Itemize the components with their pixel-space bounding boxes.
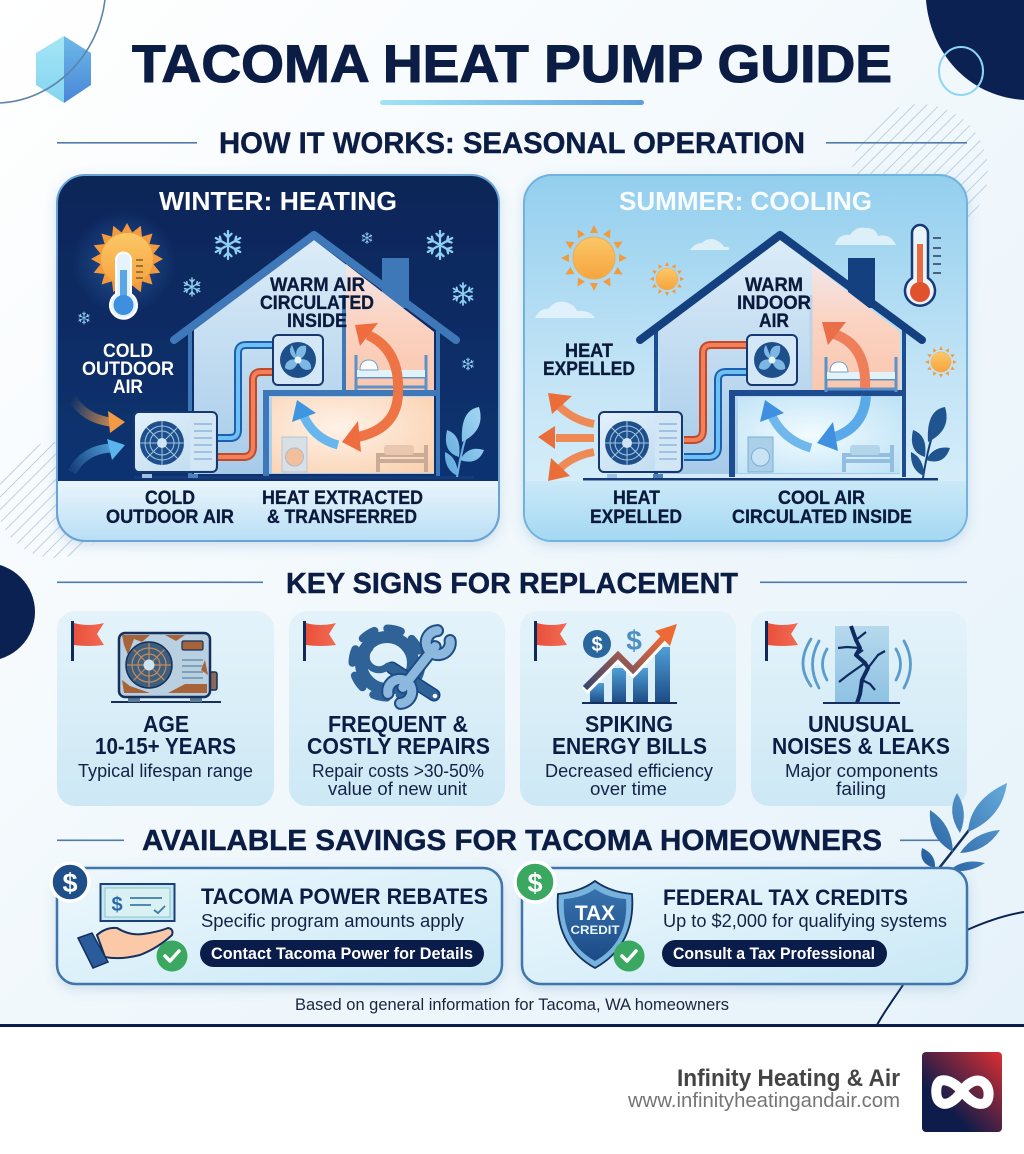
pill: consult tax professional	[662, 940, 887, 967]
brand name: Infinity Heating & Air	[677, 1065, 900, 1092]
heading: repairs: COSTLY REPAIRS	[307, 733, 490, 759]
caption: heat extracted: & TRANSFERRED	[267, 507, 417, 528]
icon: clouds	[535, 228, 896, 318]
text: noises detail	[785, 761, 938, 799]
footnote: Based on general information for Tacoma, WA homeowners	[295, 996, 729, 1014]
heading: repairs: FREQUENT &	[328, 711, 468, 737]
arrows: indoor circulation	[292, 323, 398, 452]
caption: cold outdoor air	[106, 488, 234, 528]
label: heat expelled: EXPELLED	[543, 359, 635, 380]
arrows: outdoor air	[72, 398, 125, 472]
label: heat expelled: HEAT	[565, 341, 613, 362]
text: age detail: Typical lifespan range	[78, 761, 253, 781]
house: winter	[134, 235, 474, 479]
text: repairs detail: Repair costs >30-50%	[312, 761, 484, 781]
icon: check in hand: $	[111, 894, 123, 916]
panel: summer cooling	[524, 175, 967, 541]
label: warm indoor air: WARM	[745, 275, 803, 296]
text: energy detail	[545, 761, 713, 799]
heading: savings: AVAILABLE SAVINGS FOR TACOMA HOMEOWNERS	[142, 825, 882, 857]
panel: tacoma power rebates	[51, 863, 502, 984]
text: energy detail: Decreased efficiency	[545, 761, 713, 781]
caption: cold outdoor air: COLD	[145, 488, 195, 509]
title underline	[380, 100, 644, 105]
caption: cold outdoor air: OUTDOOR AIR	[106, 507, 234, 528]
caption: heat extracted: HEAT EXTRACTED	[262, 488, 423, 509]
label: warm indoor air: AIR	[759, 311, 789, 332]
icon: red flag	[303, 621, 336, 661]
pipes: summer	[684, 345, 747, 457]
heading: noises: NOISES & LEAKS	[772, 733, 950, 759]
label: warm air circulated inside: CIRCULATED	[260, 293, 374, 314]
icon: green check	[614, 940, 644, 972]
footer	[0, 1024, 1024, 1154]
icon: green dollar badge	[515, 862, 555, 902]
label: warm air circulated inside: WARM AIR	[270, 275, 365, 296]
icon: suns	[561, 225, 957, 378]
caption: cool air circulated inside	[732, 488, 912, 528]
icon: plant	[911, 407, 950, 478]
text: federal detail: Up to $2,000 for qualifying systems	[663, 910, 947, 931]
label: warm indoor air: INDOOR	[737, 293, 811, 314]
caption: heat expelled: HEAT	[613, 488, 660, 509]
heading: energy: ENERGY BILLS	[552, 733, 707, 759]
icon: indoor fan unit	[747, 335, 797, 385]
heading: age: AGE	[143, 711, 189, 737]
text: repairs detail: value of new unit	[328, 779, 467, 799]
card: energy bills	[520, 611, 736, 806]
text: noises detail: Major components	[785, 761, 938, 781]
panel: federal tax credits	[515, 862, 967, 984]
label: warm air circulated inside: INSIDE	[287, 311, 347, 332]
heading: age: 10-15+ YEARS	[95, 733, 236, 759]
text: repairs detail	[312, 761, 484, 799]
icon: snowflakes	[79, 231, 473, 370]
icon: outdoor unit	[599, 412, 682, 478]
text: noises detail: failing	[836, 779, 886, 799]
pill: contact tacoma power	[200, 940, 484, 967]
caption: heat extracted	[262, 488, 423, 528]
heading: age	[95, 711, 236, 759]
caption: cool air circulated inside: COOL AIR	[778, 488, 865, 509]
pill: consult tax professional: Consult a Tax Professional	[673, 944, 875, 963]
caption: heat expelled: EXPELLED	[590, 507, 682, 528]
icon: dollar badge	[51, 863, 89, 901]
icon: rising bills chart: $	[591, 634, 603, 656]
panel: winter heating	[57, 175, 499, 541]
heading: noises: UNUSUAL	[808, 711, 914, 737]
label: warm indoor air	[737, 275, 811, 332]
icon: rising bills chart	[582, 624, 677, 704]
label: cold outdoor air: OUTDOOR	[82, 359, 174, 380]
icon: red flag	[534, 621, 567, 661]
icon: gear and wrenches	[352, 628, 453, 706]
icon: green dollar badge: $	[527, 868, 543, 898]
arrows: heat expelled	[538, 393, 594, 481]
icon: brand logo	[922, 1052, 1002, 1132]
icon: sun and thermometer	[72, 210, 176, 319]
icon: tax credit shield: TAX	[575, 902, 615, 925]
icon: red flag	[765, 621, 798, 661]
icon: red flag	[71, 621, 104, 661]
title: TACOMA HEAT PUMP GUIDE	[132, 35, 892, 94]
icon: tax credit shield: CREDIT	[570, 925, 620, 937]
icon: rusty unit	[111, 633, 221, 702]
icon: logo hexagon	[36, 36, 91, 103]
heading: how it works: HOW IT WORKS: SEASONAL OPERATION	[219, 127, 805, 160]
brand url: www.infinityheatingandair.com	[627, 1090, 900, 1112]
text: energy detail: over time	[590, 779, 667, 799]
heading: energy: SPIKING	[585, 711, 673, 737]
card: repairs	[289, 611, 505, 806]
icon: dollar badge: $	[62, 868, 78, 898]
label: cold outdoor air: COLD	[103, 341, 153, 362]
label: warm air circulated inside	[260, 275, 374, 332]
icon: decorative leaves	[921, 783, 1007, 872]
heading: rebates: TACOMA POWER REBATES	[201, 884, 488, 909]
card: noises and leaks	[751, 611, 967, 806]
label: cold outdoor air: AIR	[113, 377, 143, 398]
heading: federal credits: FEDERAL TAX CREDITS	[663, 885, 908, 910]
icon: check in hand	[78, 884, 174, 968]
icon: plant	[445, 407, 484, 477]
heading: key signs: KEY SIGNS FOR REPLACEMENT	[286, 568, 738, 600]
icon: outdoor unit	[134, 412, 217, 478]
icon: rising bills chart: $	[626, 625, 642, 656]
icon: cracked panel and sound waves	[803, 626, 910, 703]
arrows: indoor circulation	[760, 322, 866, 451]
heading: energy	[552, 711, 707, 759]
label: heat expelled	[543, 341, 635, 380]
card: age	[57, 611, 274, 806]
caption: cool air circulated inside: CIRCULATED INSIDE	[732, 507, 912, 528]
house: summer	[583, 235, 938, 480]
text: rebates detail: Specific program amounts apply	[201, 910, 465, 931]
heading: repairs	[307, 711, 490, 759]
caption: heat expelled	[590, 488, 682, 528]
icon: red thermometer	[905, 225, 941, 306]
pipes: winter	[218, 345, 273, 457]
label: cold outdoor air	[82, 341, 174, 398]
icon: indoor fan unit	[273, 335, 323, 385]
icon: tax credit shield	[558, 881, 632, 968]
heading: noises	[772, 711, 950, 759]
heading: summer: SUMMER: COOLING	[619, 186, 872, 216]
icon: green check	[156, 940, 188, 972]
pill: contact tacoma power: Contact Tacoma Power for Details	[211, 944, 473, 963]
heading: winter: WINTER: HEATING	[159, 186, 397, 216]
